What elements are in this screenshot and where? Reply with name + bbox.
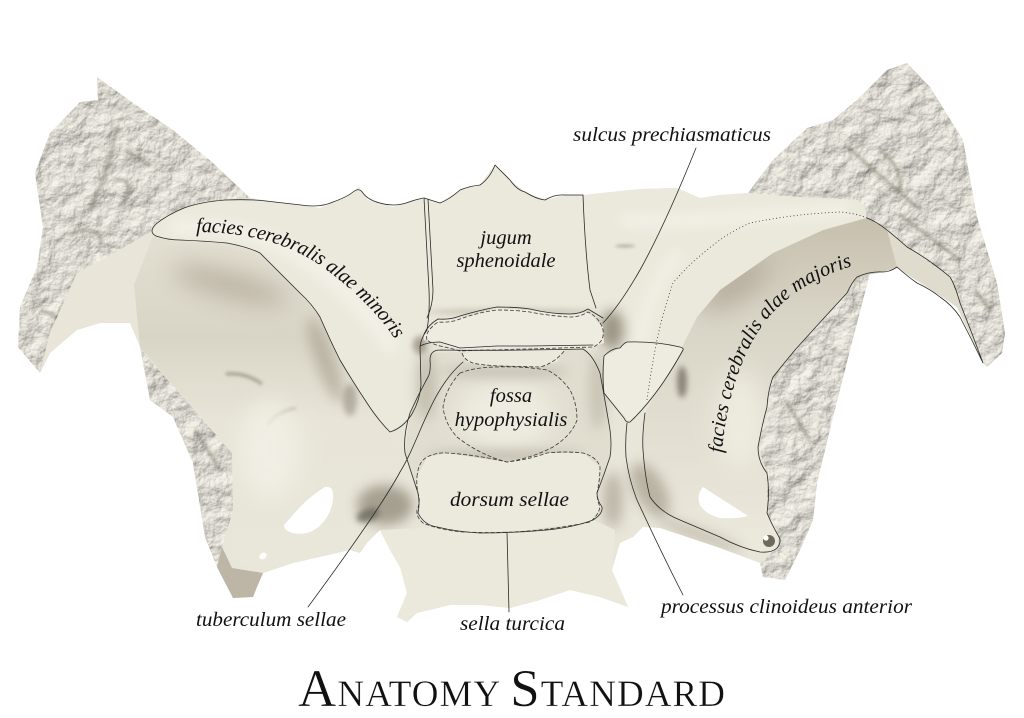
foramen rotundum left bbox=[284, 487, 333, 534]
label: facies cerebralis alae majoris: facies cerebralis alae majoris bbox=[708, 256, 851, 454]
left lesser wing bbox=[152, 187, 430, 432]
limbus band fill bbox=[424, 308, 604, 350]
left flank rough surface bbox=[140, 347, 233, 567]
outline: sella turcica contour bbox=[405, 349, 611, 533]
label: processus clinoideus anterior: processus clinoideus anterior bbox=[659, 596, 913, 618]
outline: limbus band bbox=[420, 307, 603, 351]
leader: processus clinoideus anterior bbox=[626, 423, 683, 595]
jugum and right lesser wing bbox=[423, 165, 866, 422]
anterior clinoid process fill bbox=[604, 342, 683, 422]
leader: tuberculum sellae bbox=[308, 362, 463, 607]
left wing smooth crest bbox=[40, 234, 152, 373]
foramen rotundum right bbox=[699, 487, 748, 518]
lesser wing highlights bbox=[170, 210, 850, 400]
small foramen left bbox=[258, 551, 268, 561]
dorsum sellae fill bbox=[417, 453, 602, 532]
right greater wing rough surface bbox=[748, 63, 1005, 367]
label: dorsum sellae: dorsum sellae bbox=[450, 489, 569, 511]
tuberculum bump bbox=[462, 348, 565, 367]
label: sella turcica: sella turcica bbox=[460, 613, 565, 635]
label: jugum sphenoidale bbox=[456, 227, 556, 272]
leader: sella turcica bbox=[507, 532, 509, 612]
left greater wing rough surface bbox=[18, 77, 250, 373]
outline: jugum lines bbox=[424, 165, 596, 318]
label: fossa hypophysialis bbox=[455, 385, 567, 431]
outline: tuberculum sellae bbox=[462, 350, 565, 367]
label: fossa hypophysialis: hypophysialis bbox=[455, 409, 567, 431]
sella turcica floor bbox=[405, 348, 610, 532]
label: jugum sphenoidale: sphenoidale bbox=[456, 250, 556, 272]
dark lower left fragment bbox=[217, 547, 263, 598]
bone illustration bbox=[18, 63, 1005, 622]
bone silhouette base bbox=[18, 63, 1005, 622]
clivus bbox=[380, 520, 628, 622]
outline: fossa hypophysialis bbox=[443, 367, 577, 462]
label: sulcus prechiasmaticus: sulcus prechiasmaticus bbox=[573, 124, 771, 146]
outline: left lesser wing bbox=[152, 190, 429, 432]
right flank rough surface bbox=[758, 273, 870, 580]
outline: dorsum sellae bbox=[417, 452, 600, 532]
label: jugum sphenoidale: jugum bbox=[477, 227, 532, 249]
sella shading bbox=[413, 309, 624, 528]
leader: sulcus prechiasmaticus bbox=[603, 148, 696, 323]
right wing smooth crest bbox=[835, 218, 983, 363]
right orbital surface bbox=[643, 218, 897, 552]
rough surface ridges bbox=[40, 125, 990, 470]
label: facies cerebralis alae minoris: facies cerebralis alae minoris bbox=[196, 218, 402, 338]
label: tuberculum sellae: tuberculum sellae bbox=[196, 609, 346, 631]
label: fossa hypophysialis: fossa bbox=[490, 385, 532, 407]
outline: dotted border of lesser wing bbox=[647, 212, 867, 400]
left orbital surface bbox=[134, 236, 405, 573]
surface shading bbox=[169, 249, 777, 556]
small foramen right bbox=[763, 535, 775, 547]
outline: anterior clinoid process bbox=[603, 342, 683, 422]
title: ANATOMY STANDARD bbox=[298, 660, 725, 718]
outline: right greater wing cerebral surface bbox=[643, 218, 983, 552]
